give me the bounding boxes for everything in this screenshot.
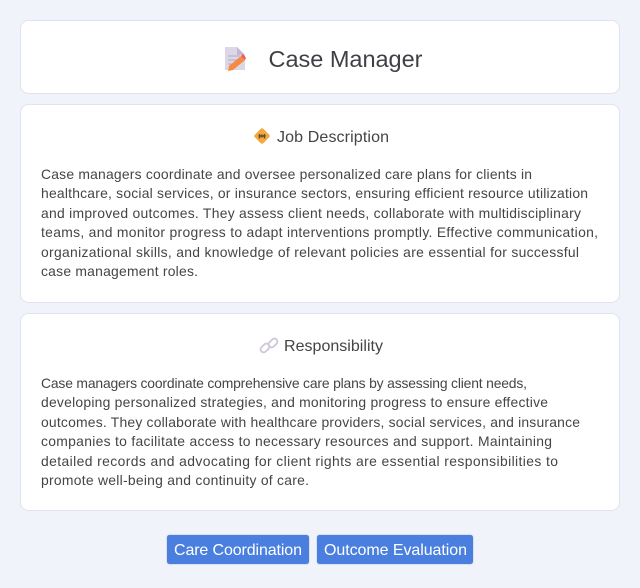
panel: title — [20, 20, 620, 94]
tag: outcome evaluation — [316, 534, 474, 564]
job description text: Case managers coordinate and oversee personalized care plans for clients in — [41, 166, 532, 182]
responsibility text: Case managers coordinate comprehensive care plans by assessing client needs, — [41, 375, 527, 391]
icon: chain link — [259, 337, 279, 354]
responsibility text: companies to facilitate access to necessary resources and support. Maintaining — [41, 433, 552, 449]
tag: care coordination: Care Coordination — [174, 542, 302, 559]
job description text: healthcare, social services, or insurance sectors, ensuring efficient resource utilization — [41, 185, 588, 201]
job description text: teams, and monitor progress to adapt interventions promptly. Effective communication, — [41, 224, 598, 240]
job description text: organizational skills, and knowledge of relevant policies are essential for successful — [41, 244, 579, 260]
responsibility text: outcomes. They collaborate with healthcare providers, social services, and insurance — [41, 414, 580, 430]
heading: job description: Job Description — [277, 129, 389, 146]
job description text — [41, 166, 598, 279]
heading: responsibility: Responsibility — [284, 338, 383, 355]
responsibility text — [41, 375, 580, 488]
tag: outcome evaluation: Outcome Evaluation — [324, 542, 467, 559]
job description text: and improved outcomes. They assess client needs, collaborate with multidisciplinary — [41, 205, 581, 221]
title text: Case Manager — [268, 46, 423, 72]
icon: orange diamond sign — [254, 128, 270, 144]
tag: care coordination — [166, 534, 310, 564]
responsibility text: detailed records and advocating for client rights are essential responsibilities to — [41, 453, 558, 469]
job description text: case management roles. — [41, 263, 198, 279]
panel: job description — [20, 104, 620, 302]
icon: document with pencil — [225, 47, 246, 71]
responsibility text: developing personalized strategies, and monitoring progress to ensure effective — [41, 394, 548, 410]
responsibility text: promote well-being and continuity of care. — [41, 472, 309, 488]
panel: responsibility — [20, 314, 620, 510]
